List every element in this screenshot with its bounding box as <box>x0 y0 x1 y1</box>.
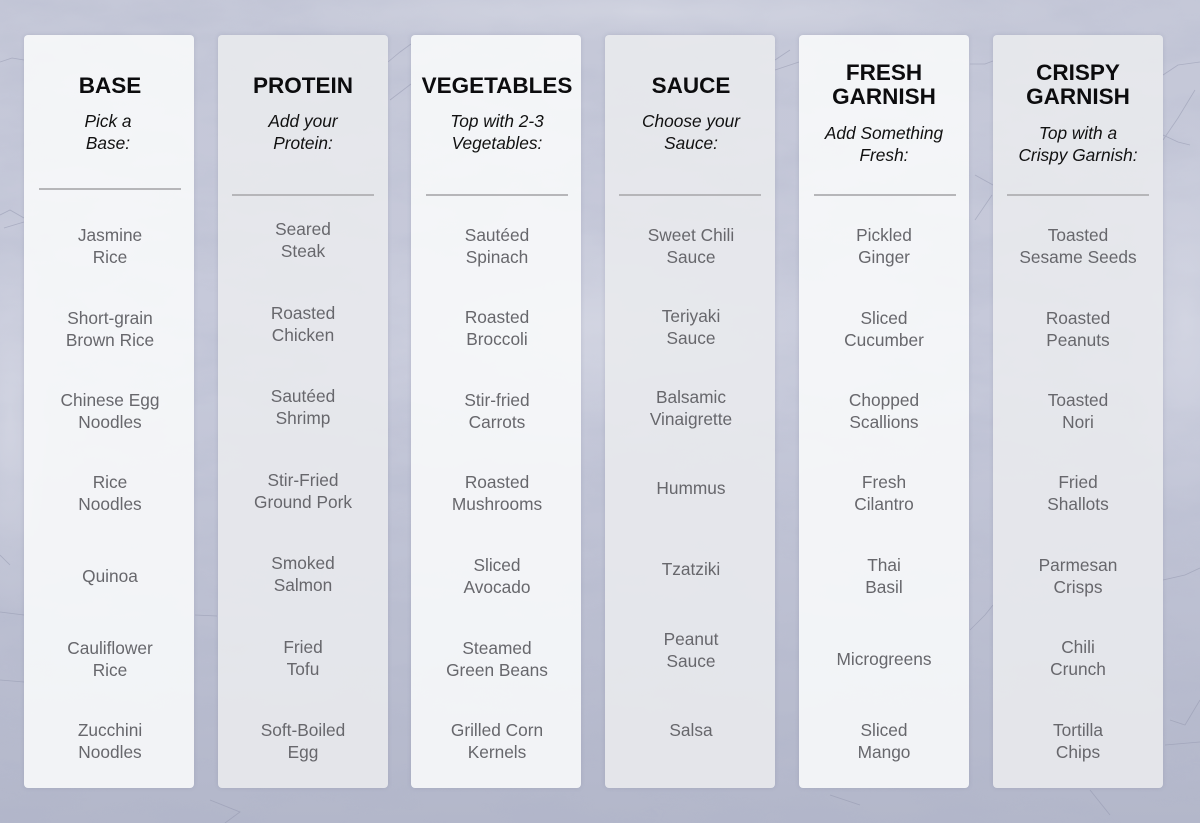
item: balsamic vinaigrette: Balsamic <box>656 387 726 407</box>
item: cauliflower rice: Rice <box>93 660 127 680</box>
item: jasmine rice <box>78 225 142 267</box>
heading: sauce: SAUCE <box>652 73 730 98</box>
item: tzatziki: Tzatziki <box>662 559 720 579</box>
item: chopped scallions <box>849 390 919 432</box>
item: balsamic vinaigrette <box>650 387 732 429</box>
item: roasted chicken <box>271 303 335 345</box>
item: jasmine rice: Jasmine <box>78 225 142 245</box>
subtitle: base: Pick a <box>84 111 132 131</box>
subtitle: vegetables <box>450 111 544 153</box>
item: thai basil: Thai <box>867 555 901 575</box>
item: teriyaki sauce <box>662 306 720 348</box>
item: salsa: Salsa <box>669 720 713 740</box>
item: seared steak <box>275 219 331 261</box>
item: sliced mango: Mango <box>858 742 910 762</box>
subtitle: sauce <box>642 111 741 153</box>
item: sauteed shrimp: Sautéed <box>271 386 335 406</box>
item: toasted nori: Toasted <box>1048 390 1108 410</box>
item: chili crunch: Chili <box>1061 637 1095 657</box>
subtitle: protein: Add your <box>268 111 338 131</box>
subtitle: crispy garnish: Crispy Garnish: <box>1018 145 1138 165</box>
item: toasted sesame seeds: Toasted <box>1048 225 1108 245</box>
heading: crispy garnish: GARNISH <box>1026 84 1130 109</box>
heading: fresh garnish: GARNISH <box>832 84 936 109</box>
item: fresh cilantro <box>854 472 914 514</box>
item: balsamic vinaigrette: Vinaigrette <box>650 409 732 429</box>
item: roasted mushrooms: Mushrooms <box>452 494 542 514</box>
item: roasted peanuts <box>1046 308 1110 350</box>
item: seared steak: Seared <box>275 219 331 239</box>
item: stir-fried ground pork <box>254 470 352 512</box>
item: grilled corn kernels: Grilled Corn <box>451 720 543 740</box>
item: rice noodles: Rice <box>93 472 127 492</box>
item: roasted broccoli: Roasted <box>465 307 529 327</box>
heading: vegetables: VEGETABLES <box>422 73 572 98</box>
item: smoked salmon: Smoked <box>271 553 335 573</box>
heading: protein: PROTEIN <box>253 73 353 98</box>
subtitle: protein <box>268 111 338 153</box>
item: quinoa: Quinoa <box>82 566 138 586</box>
item: parmesan crisps: Parmesan <box>1039 555 1117 575</box>
heading: base: BASE <box>79 73 141 98</box>
item: rice noodles: Noodles <box>78 494 142 514</box>
item: pickled ginger: Pickled <box>856 225 912 245</box>
item: tortilla chips <box>993 720 1163 764</box>
item: sauteed spinach <box>465 225 529 267</box>
item: cauliflower rice: Cauliflower <box>67 638 153 658</box>
heading: fresh garnish <box>832 60 936 109</box>
item: teriyaki sauce: Teriyaki <box>662 306 720 326</box>
item: sweet chili sauce <box>648 225 734 267</box>
item: soft-boiled egg <box>261 720 345 762</box>
item: peanut sauce: Sauce <box>666 651 716 671</box>
panel: sauce <box>605 35 775 788</box>
item: steamed green beans: Green Beans <box>446 660 548 680</box>
item: roasted chicken: Roasted <box>271 303 335 323</box>
item: roasted peanuts: Peanuts <box>1046 330 1110 350</box>
item: roasted broccoli <box>465 307 529 349</box>
item: rice noodles <box>78 472 142 514</box>
item: zucchini noodles <box>78 720 142 762</box>
item: sauteed spinach: Spinach <box>466 247 528 267</box>
item: sweet chili sauce: Sweet Chili <box>648 225 734 245</box>
item: pickled ginger: Ginger <box>858 247 910 267</box>
item: fresh cilantro: Fresh <box>862 472 906 492</box>
subtitle: fresh garnish <box>824 123 943 165</box>
item: short-grain brown rice <box>66 308 154 350</box>
item: grilled corn kernels: Kernels <box>468 742 526 762</box>
item: zucchini noodles: Noodles <box>78 742 142 762</box>
item: parmesan crisps <box>993 555 1163 599</box>
item: fried shallots: Shallots <box>1047 494 1109 514</box>
item: steamed green beans <box>446 638 548 680</box>
item: thai basil: Basil <box>865 577 903 597</box>
item: sliced avocado: Avocado <box>464 577 530 597</box>
item: microgreens: Microgreens <box>836 649 932 669</box>
item: fried tofu <box>283 637 323 679</box>
item: smoked salmon: Salmon <box>274 575 332 595</box>
item: soft-boiled egg: Soft-Boiled <box>261 720 345 740</box>
item: short-grain brown rice: Brown Rice <box>66 330 154 350</box>
subtitle: crispy garnish: Top with a <box>1039 123 1117 143</box>
subtitle: fresh garnish: Add Something <box>825 123 943 143</box>
item: stir-fried carrots: Stir-fried <box>464 390 530 410</box>
item: zucchini noodles: Zucchini <box>78 720 142 740</box>
subtitle: base <box>84 111 132 153</box>
item: stir-fried carrots: Carrots <box>469 412 525 432</box>
item: fried shallots: Fried <box>1058 472 1098 492</box>
item: sweet chili sauce: Sauce <box>666 247 716 267</box>
subtitle: protein: Protein: <box>273 133 333 153</box>
item: hummus: Hummus <box>656 478 726 498</box>
item: roasted broccoli: Broccoli <box>466 329 528 349</box>
subtitle: sauce: Choose your <box>642 111 740 131</box>
panel: fresh garnish <box>799 35 969 788</box>
item: chinese egg noodles <box>61 390 159 432</box>
heading: fresh garnish: FRESH <box>846 60 922 85</box>
item: chili crunch <box>993 637 1163 681</box>
subtitle: base: Base: <box>86 133 130 153</box>
panel: protein <box>218 35 388 788</box>
item: tortilla chips: Tortilla <box>1053 720 1103 740</box>
subtitle: crispy garnish <box>1018 123 1138 165</box>
item: stir-fried ground pork: Stir-Fried <box>267 470 339 490</box>
item: fried tofu: Fried <box>283 637 323 657</box>
item: toasted nori: Nori <box>1062 412 1094 432</box>
subtitle: sauce: Sauce: <box>664 133 718 153</box>
item: chinese egg noodles: Noodles <box>78 412 142 432</box>
panel: base <box>24 35 194 788</box>
item: sliced avocado <box>464 555 530 597</box>
item: sliced mango <box>858 720 910 762</box>
item: roasted peanuts: Roasted <box>1046 308 1110 328</box>
panel: crispy garnish <box>993 35 1163 788</box>
subtitle: fresh garnish: Fresh: <box>860 145 908 165</box>
item: sliced avocado: Sliced <box>473 555 521 575</box>
item: seared steak: Steak <box>281 241 325 261</box>
item: teriyaki sauce: Sauce <box>666 328 716 348</box>
item: cauliflower rice <box>67 638 153 680</box>
item: chopped scallions: Chopped <box>849 390 919 410</box>
item: short-grain brown rice: Short-grain <box>67 308 153 328</box>
item: roasted chicken: Chicken <box>272 325 334 345</box>
item: tortilla chips: Chips <box>1056 742 1100 762</box>
item: smoked salmon <box>271 553 335 595</box>
subtitle: vegetables: Top with 2-3 <box>450 111 544 131</box>
item: stir-fried carrots <box>464 390 530 432</box>
item: sliced mango: Sliced <box>860 720 908 740</box>
item: sauteed shrimp: Shrimp <box>276 408 330 428</box>
item: thai basil <box>865 555 903 597</box>
item: fried shallots <box>993 472 1163 516</box>
item: steamed green beans: Steamed <box>462 638 532 658</box>
item: toasted sesame seeds: Sesame Seeds <box>1019 247 1137 267</box>
item: grilled corn kernels <box>451 720 543 762</box>
item: sliced cucumber: Sliced <box>860 308 908 328</box>
item: peanut sauce: Peanut <box>664 629 718 649</box>
item: sauteed shrimp <box>271 386 335 428</box>
heading: crispy garnish <box>1026 60 1130 109</box>
item: toasted sesame seeds <box>1019 225 1137 267</box>
item: toasted nori <box>993 390 1163 434</box>
item: peanut sauce <box>664 629 718 671</box>
item: sauteed spinach: Sautéed <box>465 225 529 245</box>
item: chili crunch: Crunch <box>1050 659 1106 679</box>
panel: vegetables <box>411 35 581 788</box>
heading: crispy garnish: CRISPY <box>1036 60 1120 85</box>
item: sliced cucumber: Cucumber <box>844 330 924 350</box>
item: jasmine rice: Rice <box>93 247 127 267</box>
item: fried tofu: Tofu <box>287 659 319 679</box>
item: pickled ginger <box>856 225 912 267</box>
item: roasted mushrooms <box>452 472 542 514</box>
item: parmesan crisps: Crisps <box>1054 577 1102 597</box>
subtitle: vegetables: Vegetables: <box>452 133 542 153</box>
item: chinese egg noodles: Chinese Egg <box>61 390 159 410</box>
item: roasted mushrooms: Roasted <box>465 472 529 492</box>
item: sliced cucumber <box>844 308 924 350</box>
item: fresh cilantro: Cilantro <box>854 494 914 514</box>
item: soft-boiled egg: Egg <box>288 742 318 762</box>
item: stir-fried ground pork: Ground Pork <box>254 492 352 512</box>
item: chopped scallions: Scallions <box>849 412 919 432</box>
